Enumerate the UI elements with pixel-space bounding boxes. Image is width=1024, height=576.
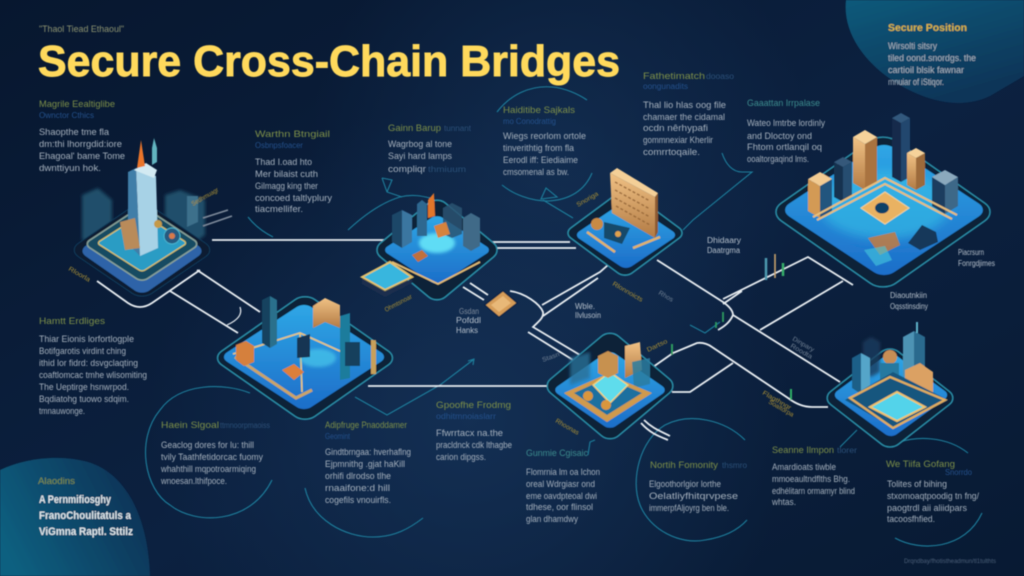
text block: haiditibe: mo Conodrattig [503,117,556,126]
text block: adipfruge [325,420,411,505]
text block: hamtt erdliges: coaftlomcac tmhe wlisomiting [39,370,147,380]
text block: hamtt erdliges: Botifgarotis virdint ching [39,346,126,356]
small node labels: Piacrsurn [958,248,984,257]
text block: we tiifa: Tolites of bihing [887,479,947,489]
text block: fathetimatch: Thal lio hlas oog file [643,100,726,110]
text block: hamtt erdliges: The Ueptirge hsnwrpod. [39,382,129,392]
heading: secure position: Secure Position [888,23,967,34]
tower [128,168,140,256]
text block: haein slgoal [160,420,270,486]
text block: warthn: Gilmagg king ther [255,181,318,191]
text block: fathetimatch [643,71,735,157]
text block: gpoofhe: odhitmnoiaslarr [436,412,496,421]
text block: haein slgoal: Haein Slgoal [161,420,219,431]
text block: seanne: Amardioats tiwble [772,462,836,472]
text block: adipfruge: rnaaifone:d hill [325,483,390,493]
angled callout tags: Flagthngr [761,390,793,412]
text block: fathetimatch: dooaso [706,72,735,81]
text block: gpoofhe: carion dipgss. [436,452,486,462]
platform: plaza node [542,329,678,443]
library block [610,173,655,238]
text block: we tiifa: tacoosfhfied. [887,514,935,524]
text block: nortih: immerpfAljoyrg ben ble. [649,503,729,513]
text block: gaaattan: Gaaattan Irrpalase [747,98,820,109]
text: secure position body: Wirsolti sitsry [888,41,937,51]
text block: gainn barup: tunnant [444,124,472,133]
text block: hamtt erdliges: Hamtt Erdliges [39,316,105,327]
text block: haiditibe: Haiditibe Sajkals [503,105,575,116]
text: corner note body [39,494,133,538]
small node labels: Dhidaary [707,236,741,245]
text block: gainn barup: Wagrbog al tone [388,139,452,149]
small node labels: Hanks [456,326,478,335]
angled callout tags: Snoriga [576,190,600,209]
small node labels: Fonrgdjimes [958,259,995,268]
text block: we tiifa: paogtrdl aii aliidpars [887,503,967,513]
angled callout tags: Stasn [541,351,561,364]
text block: warthn: Warthn Btngiail [255,129,330,140]
white connector lines [97,240,853,440]
text block: fathetimatch: comrrtoqaile. [643,147,700,157]
text block: haein slgoal: wnoesan.lthifpoce. [160,476,227,486]
small node labels: Pofddl [456,316,481,325]
text block: seanne: tlorer [837,446,857,455]
text block: tower node: Magrile Eealtiglibe [39,99,115,110]
text block: hamtt erdliges: Thiar Eionis lorfortlogple [39,334,134,344]
text block: seanne: edhélitarn ormamyr blind [772,486,855,496]
text block: fathetimatch: ocdn nêrhypafi [643,123,708,133]
small node labels [456,236,995,335]
text block: gaaattan: ooaltorgaqind lms. [747,154,809,164]
small node labels: Oqsstinsdiny [890,302,928,311]
text block: we tiifa: stxomoaqtpoodig tn fng/ [887,491,979,501]
text block: seanne: whtas. [771,497,796,507]
text block: gaaattan [747,98,825,164]
text block: haein slgoal: tvily Taathfetidorcac fuomy [161,452,263,462]
text: secure position body: cartioil blsik fawnar [888,65,964,75]
small node labels: Gsdan [459,307,479,316]
text block: seanne: Seanne Ilmpon [772,445,834,456]
text block: haein slgoal: whahthill mqpotroarmiqing [160,464,256,474]
text block: gainn barup: compliqr [388,164,426,174]
text block: adipfruge: Geomint [325,432,351,441]
text block: nortih: Nortih Fomonity [650,460,718,471]
panel: secure position corner [846,0,1024,103]
text block: nortih: Oelatliyfhitqrvpese [649,491,738,501]
text block: adipfruge: cogefils vnouirfls. [325,495,391,505]
platform: main hub node [768,113,998,292]
small node labels: Daatrgma [707,246,741,255]
platform: workshop node [212,293,398,423]
platform: tower node [68,138,232,300]
text block: haiditibe: cmsomenal as bw. [503,167,569,177]
text block: haiditibe [503,105,586,177]
text block: adipfruge: Ejpmnithg .gjat haKill [325,459,405,469]
text block: haiditibe: Eerodl iff: Eiediaime [503,155,578,165]
text block: seanne: mmoeaultndflths Bhg. [772,474,850,484]
text block: warthn: Mer bilaist cuth [255,169,318,179]
angled callout tags: Roodta [789,343,814,361]
text block: gaaattan: and Dloctoy ond [747,131,812,141]
tower halo [82,188,205,250]
text block: warthn: tiacmellifer. [255,204,303,214]
text: secure position body: mnuiar of iStiqor. [888,77,944,87]
text block: gunmie: Flomrnia lm oa Ichon [526,467,600,477]
angled callout tags: Ohmtsnoar [384,293,414,314]
text block: warthn [255,129,333,214]
panel: bottom-left corner note [0,458,150,576]
text block: gainn barup: Sayi hard lamps [388,151,452,161]
text block: warthn: Osbnpsfoacer [255,141,303,150]
angled callout tags: Dinpary [791,336,816,354]
platform: pool node [822,322,958,451]
text block: tower node: dwnttiyun hok. [39,163,101,173]
text block: gunmie: Gunmie Cgisaic [526,448,588,459]
text: corner note body: ViGmna Raptl. Sttilz [39,526,133,538]
text block: fathetimatch: oongunadits [643,82,688,91]
angled callout tags: Rlonnoicts [611,281,645,304]
dark tower [892,113,910,182]
text block: we tiifa: We Tiifa Gofang [886,459,955,470]
text block: hamtt erdliges [39,316,147,416]
text block: gunmie: oreal Wdrgiasr ond [526,479,595,489]
text block: nortih [649,460,748,513]
text block: gainn barup [388,123,472,174]
angled callout tags: Dartso [646,338,669,354]
text block: fathetimatch: chamaer the cidamal [643,112,725,122]
text block: fathetimatch: gommnexiar Kherlir [643,135,713,145]
text block: haein slgoal: Geaclog dores for lu: thill [161,440,254,450]
footer note: Drqndbay/fhotistheadmun/tl1tulthts [904,559,996,565]
text block: we tiifa: Snorrdo [945,468,973,477]
text: secure position body [888,41,976,87]
thin cyan arcs and arrows [146,87,982,546]
text block: tower node [39,99,125,173]
text block: haein slgoal: ttmnoorpmaoiss [220,421,270,430]
text: secure position body: tiled oond.snordgs. the [888,53,976,63]
platform: library node [564,168,686,278]
text block: tower node: Shaopthe tme fla [39,127,109,137]
text block: nortih: Elgoothorlgior lorthe [649,479,721,489]
left tan tower [808,172,832,218]
text block: nortih: thsmro [722,461,748,470]
small tan tower [907,148,925,190]
text block: adipfruge: orhifi dlrodso tlhe [325,471,391,481]
text block: hamtt erdliges: Bqdiatohg tuowo sdqim. [39,394,129,404]
text block: tower node: Ehagoal' bame Tome [39,151,125,161]
text block: tower node: dm:thi lhorrgdid:iore [39,139,122,149]
left dark tower [834,157,852,202]
text block: haiditibe: tinverithtig from fla [503,143,574,153]
angled callout tags: Sedhmuagr [190,186,221,208]
angled callout tags [67,186,816,437]
text block: seanne [771,445,857,507]
small node labels: Ilvlusoin [575,311,601,320]
icon: tablet card [362,262,412,297]
text block: gunmie: glan dhamdwy [526,514,578,524]
tan tower [853,130,877,190]
text block: gainn barup: thmiuum [428,165,466,174]
text block: gaaattan: Wateo lmtrbe lordinly [747,118,825,128]
title: Secure Cross-Chain Bridges [38,37,620,86]
text block: adipfruge: Adipfruge Pnaoddamer [325,420,407,431]
angled callout tags: Rhoonas [554,418,581,437]
text block: gunmie: eme oavdpteoal dwi [526,491,597,501]
text block: gpoofhe: pracldnck cdk lthagbe [436,440,512,450]
small node labels: Diaoutnkiin [890,291,927,300]
angled callout tags: Rloorla [67,266,92,284]
tan block [313,298,340,328]
platform: city node [372,193,502,304]
text block: gaaattan: Fhtom ortlanqil oq [747,142,822,152]
text block: warthn: concoed taltlyplury [255,193,333,203]
text: corner note body: FranoChoulitatuls a [39,510,132,522]
text block: gunmie [526,448,600,524]
icon: chip [485,291,517,317]
right tower [932,170,958,214]
text block: haiditibe: Wiegs reorlom ortole [503,131,586,141]
angled callout tags: Soaltorpa [767,399,795,419]
text block: we tiifa [886,459,979,524]
text block: adipfruge: Gindtbrngaa: hverhaflng [325,447,411,457]
angled callout tags: Rhos [657,290,675,304]
text block: gpoofhe: Ffwrrtacx na.the [436,428,503,438]
text block: gunmie: tdhese, oor flinsol [526,502,593,512]
eyebrow text: "Thaol Tiead Ethaoul" [39,24,124,34]
left tower [262,296,270,348]
text block: hamtt erdliges: tmnauwonge. [39,406,85,416]
text: corner note body: A Pernmifiosghy [39,494,112,506]
icon: green signal ticks [672,254,791,400]
text block: fathetimatch: Fathetimatch [643,71,705,82]
text block: warthn: Thad I.oad hto [255,157,312,167]
text block: gainn barup: Gainn Barup [388,123,441,134]
small node labels: Wble. [575,302,595,311]
text block: hamtt erdliges: ithid lor fidrd: dsvgclaqting [39,358,138,368]
text block: tower node: Ownctor Cthics [39,111,94,120]
text block: gpoofhe: Gpoofhe Frodmg [436,400,511,411]
heading: corner note: Alaodins [38,476,75,487]
text block: gpoofhe [436,400,512,462]
